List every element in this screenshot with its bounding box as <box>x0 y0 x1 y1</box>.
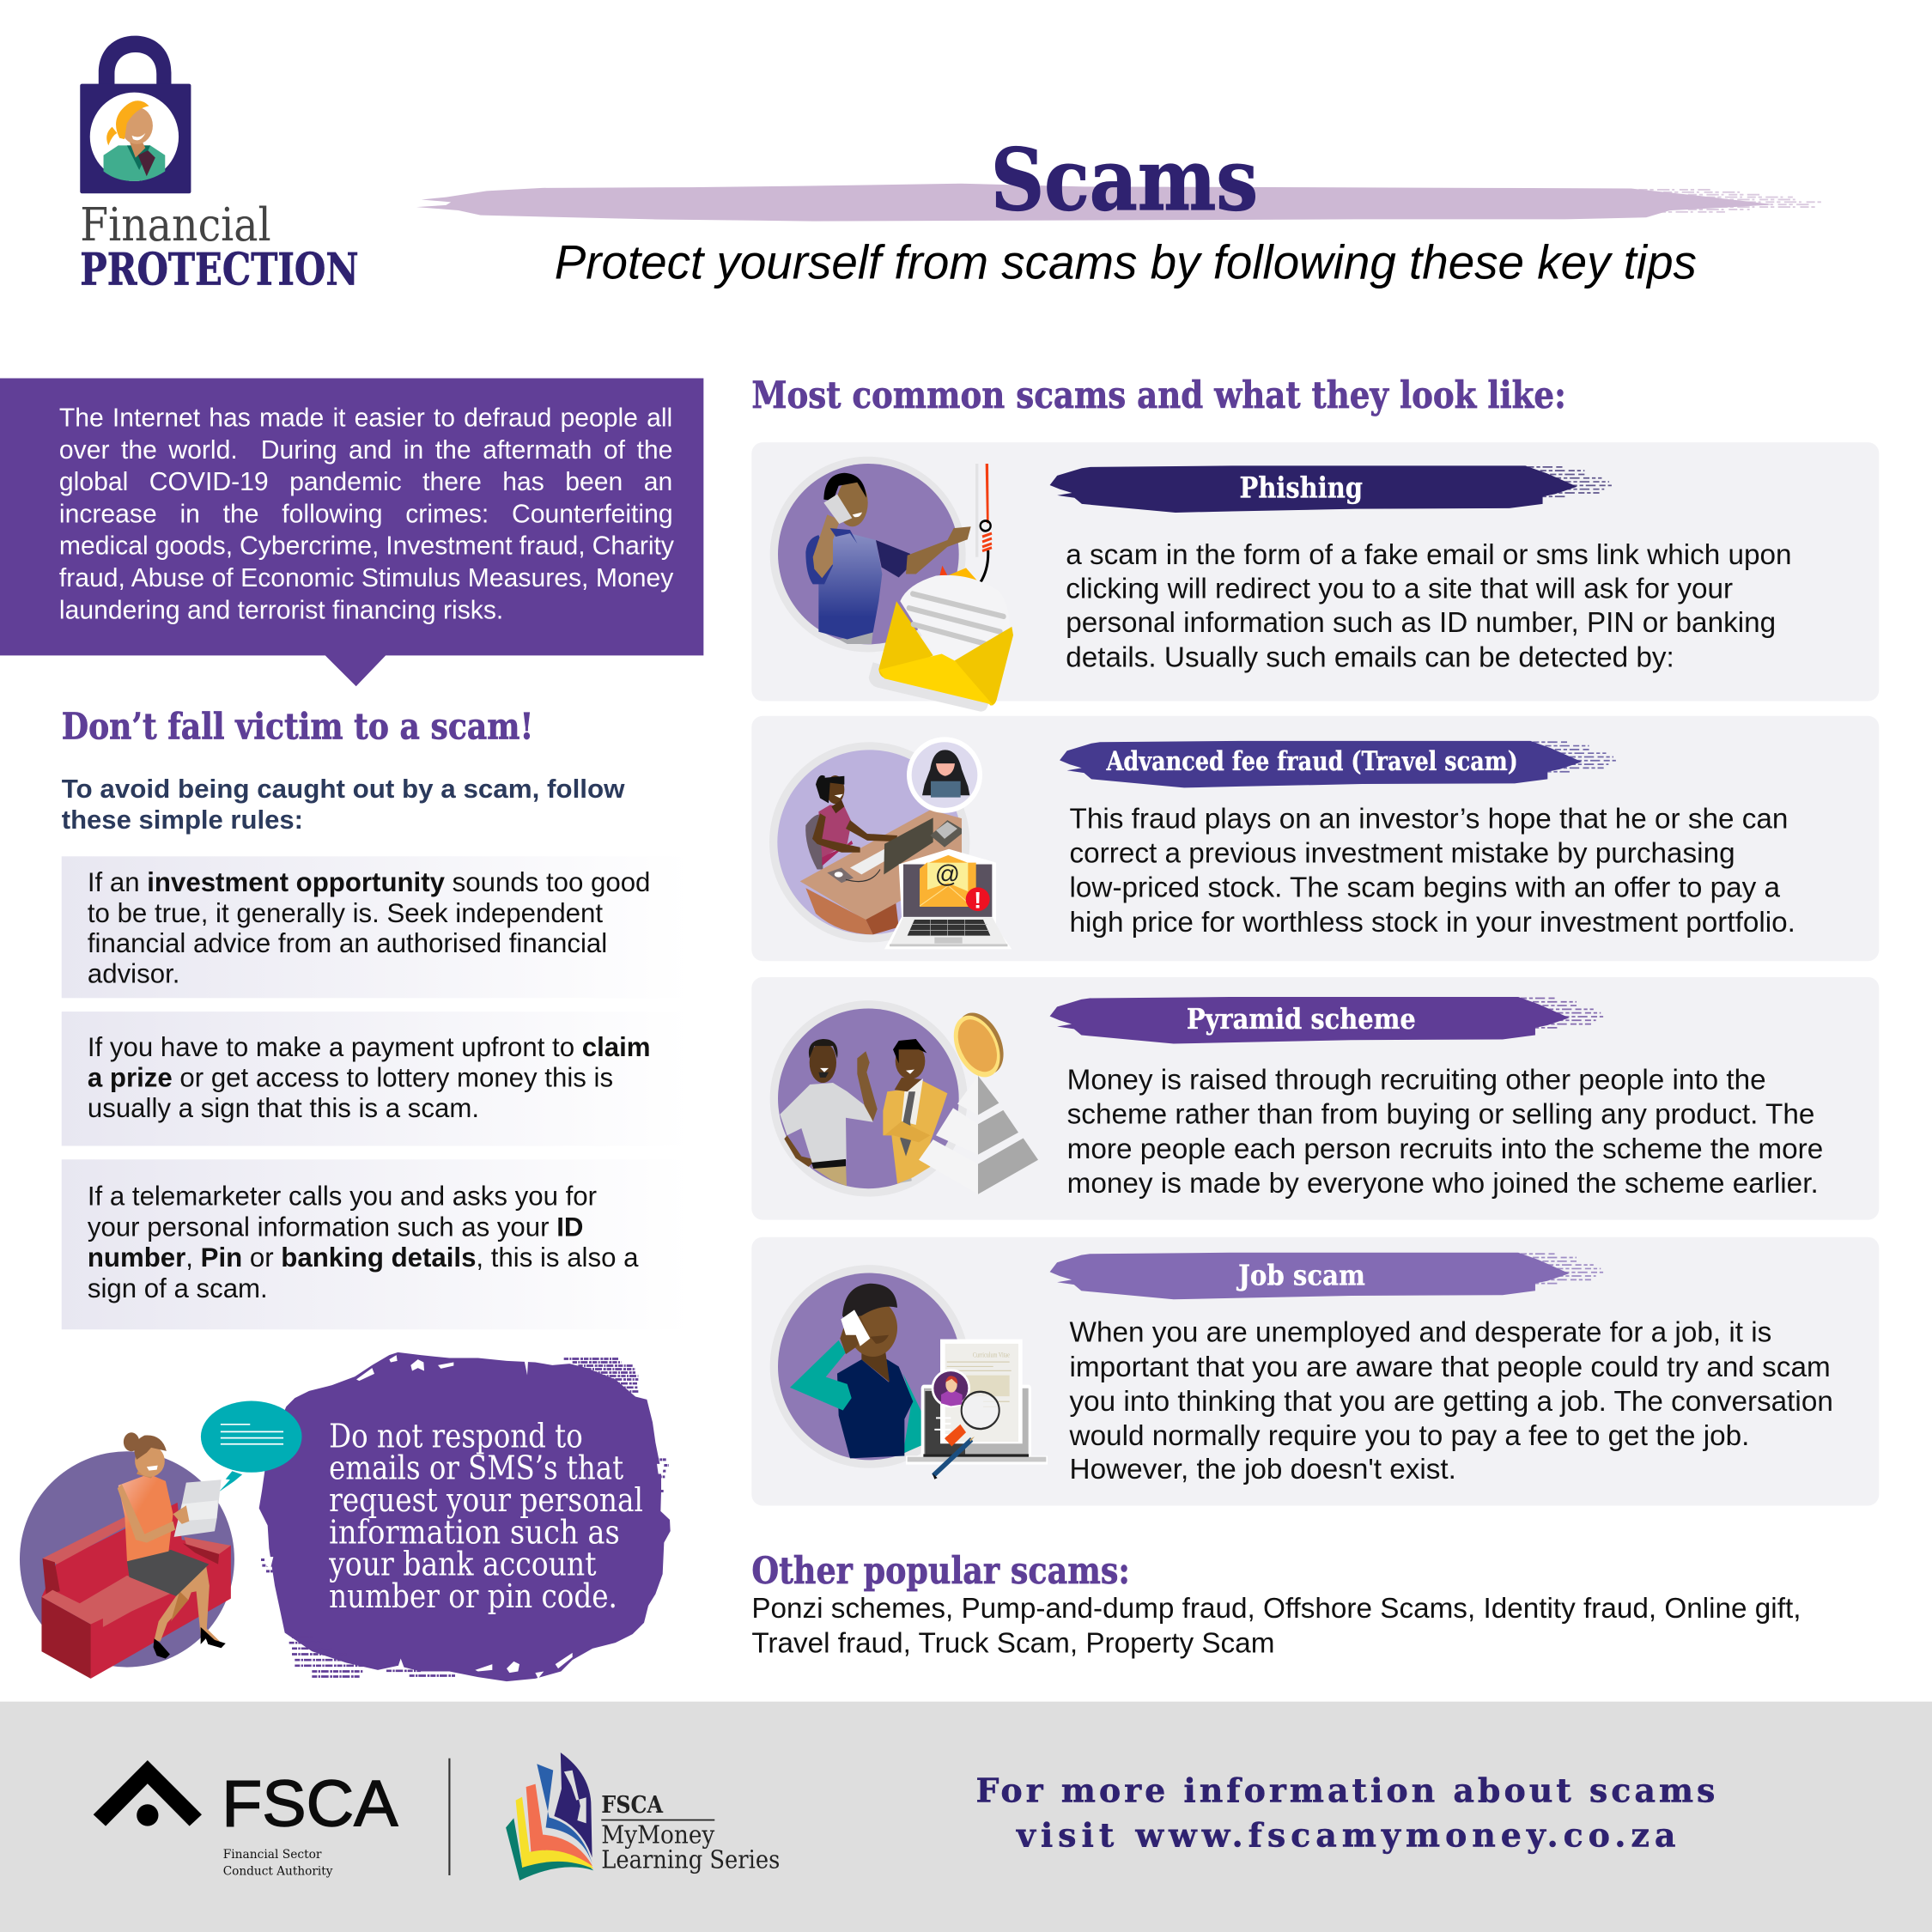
panel: pyramid scheme <box>751 977 1879 1220</box>
panel: advanced fee fraud <box>751 716 1879 961</box>
heading: don't fall victim: Don’t fall victim to a scam! <box>62 705 533 747</box>
text: pyramid scheme description: Money is raised through recruiting other people into the <box>1067 1064 1766 1096</box>
footer band <box>0 1702 1932 1932</box>
panel: introduction: global COVID-19 pandemic there has been an <box>59 468 672 496</box>
logo: FSCA <box>94 1760 398 1878</box>
icon: two men and coin on pyramid <box>770 1000 1038 1197</box>
illustration: worried woman on sofa with letter <box>20 1432 242 1679</box>
panel: introduction: laundering and terrorist financing risks. <box>59 596 503 624</box>
rule: investment opportunity: If an investment opportunity sounds too good <box>88 867 650 897</box>
rule: telemarketer <box>62 1159 690 1329</box>
callout text: number or pin code. <box>329 1577 617 1615</box>
callout text: information such as <box>329 1513 620 1551</box>
text: other popular scams list: Travel fraud, Truck Scam, Property Scam <box>751 1627 1274 1659</box>
logo: FSCA: Conduct Authority <box>223 1864 333 1878</box>
text: advanced fee fraud description: This fraud plays on an investor’s hope that he or she can <box>1070 803 1788 835</box>
text: advanced fee fraud description: low-priced stock. The scam begins with an offer to pay a <box>1070 872 1781 904</box>
heading: most common scams: Most common scams and what they look like: <box>751 374 1566 417</box>
icon: at sign and alert mark: ! <box>974 887 981 914</box>
panel: introduction: The Internet has made it easier to defraud people all <box>59 404 672 432</box>
title brush stroke <box>416 184 1821 222</box>
icon label: curriculum vitae: Curriculum Vitae <box>973 1352 1010 1359</box>
logo: FSCA: Financial Sector <box>223 1848 322 1862</box>
subheading: simple rules <box>62 774 626 835</box>
icon: at sign and alert mark <box>935 860 981 914</box>
rule: telemarketer: If a telemarketer calls you and asks you for <box>88 1181 597 1211</box>
panel: introduction: increase in the following crimes: Counterfeiting <box>59 500 673 528</box>
text: advanced fee fraud description <box>1070 803 1795 939</box>
subtitle: Protect yourself from scams by following these key tips <box>555 235 1697 289</box>
rule: telemarketer: sign of a scam. <box>88 1273 268 1303</box>
text: phishing description: a scam in the form of a fake email or sms link which upon <box>1066 539 1792 571</box>
callout: purple brush blob <box>259 1352 671 1681</box>
badge: job scam <box>1050 1253 1603 1299</box>
rule: investment opportunity <box>62 856 690 998</box>
panel: job scam <box>751 1237 1879 1506</box>
subheading: simple rules: these simple rules: <box>62 805 303 835</box>
text: job scam description: However, the job doesn't exist. <box>1070 1454 1456 1485</box>
logo: MyMoney Learning Series book <box>506 1753 780 1880</box>
text: phishing description: details. Usually such emails can be detected by: <box>1066 641 1674 673</box>
footer call to action <box>975 1771 1715 1854</box>
logo wordmark: Financial <box>80 198 271 252</box>
panel: introduction <box>0 379 703 686</box>
badge: Phishing <box>1050 465 1612 513</box>
text: phishing description <box>1066 539 1792 673</box>
rule: claim a prize: If you have to make a payment upfront to claim <box>88 1032 651 1062</box>
text: other popular scams list: Ponzi schemes, Pump-and-dump fraud, Offshore Scams, Identity fraud, Online gift, <box>751 1593 1801 1625</box>
callout text: emails or SMS’s that <box>329 1449 623 1487</box>
text: job scam description <box>1069 1317 1833 1485</box>
text: pyramid scheme description: more people each person recruits into the scheme the more <box>1067 1133 1823 1165</box>
text: pyramid scheme description: scheme rather than from buying or selling any product. The <box>1067 1099 1814 1131</box>
badge: advanced fee fraud <box>1060 741 1616 787</box>
badge: pyramid scheme: Pyramid scheme <box>1187 1002 1416 1036</box>
icon: man on phone with hooked email <box>770 457 1013 712</box>
text: job scam description: important that you are aware that people could try and scam <box>1070 1352 1831 1383</box>
badge: pyramid scheme <box>1050 997 1603 1044</box>
panel: introduction: medical goods, Cybercrime, Investment fraud, Charity <box>59 532 674 561</box>
badge: Phishing: Phishing <box>1240 471 1363 505</box>
rule: investment opportunity: to be true, it generally is. Seek independent <box>88 898 603 928</box>
rule: telemarketer: your personal information such as your ID <box>88 1212 583 1242</box>
logo: Financial Protection padlock <box>80 36 191 193</box>
callout text <box>328 1417 643 1615</box>
logo: FSCA: FSCA <box>222 1768 398 1841</box>
panel: phishing <box>751 442 1879 712</box>
subheading: simple rules: To avoid being caught out by a scam, follow <box>62 774 626 804</box>
text: job scam description: would normally require you to pay a fee to get the job. <box>1069 1420 1749 1452</box>
panel: introduction: fraud, Abuse of Economic Stimulus Measures, Money <box>59 564 673 592</box>
panel: introduction: over the world. During and in the aftermath of the <box>59 436 672 465</box>
text: phishing description: clicking will redirect you to a site that will ask for your <box>1066 574 1733 605</box>
logo wordmark: PROTECTION <box>80 244 359 295</box>
text: job scam description: When you are unemployed and desperate for a job, it is <box>1070 1317 1771 1349</box>
rule: telemarketer: number, Pin or banking details, this is also a <box>88 1242 639 1273</box>
heading: other popular scams: Other popular scams: <box>751 1550 1130 1593</box>
logo: MyMoney Learning Series book: FSCA <box>601 1791 664 1819</box>
icon: at sign and alert mark: @ <box>935 860 960 888</box>
icon: woman at desk, hacker and laptop with email alert <box>769 737 1012 949</box>
callout text: request your personal <box>329 1481 643 1519</box>
title: Scams <box>991 131 1258 230</box>
text: pyramid scheme description: money is made by everyone who joined the scheme earlier. <box>1067 1168 1819 1200</box>
rule: claim a prize: a prize or get access to lottery money this is <box>88 1063 613 1093</box>
rule: investment opportunity: financial advice from an authorised financial <box>88 928 607 958</box>
speech bubble <box>201 1401 302 1473</box>
callout text: Do not respond to <box>329 1417 583 1455</box>
footer call to action: visit www.fscamymoney.co.za <box>1016 1815 1676 1854</box>
text: job scam description: you into thinking that you are getting a job. The conversation <box>1070 1386 1833 1418</box>
logo wordmark <box>80 198 359 295</box>
logo: MyMoney Learning Series book: Learning Series <box>601 1844 780 1874</box>
icon: woman on phone with CV and laptop <box>770 1265 1048 1479</box>
badge: job scam: Job scam <box>1236 1259 1365 1292</box>
badge: advanced fee fraud: Advanced fee fraud (Travel scam) <box>1106 746 1518 777</box>
callout text: your bank account <box>328 1546 597 1583</box>
logo: MyMoney Learning Series book: MyMoney <box>601 1820 715 1850</box>
text: advanced fee fraud description: high price for worthless stock in your investment portfolio. <box>1070 907 1795 939</box>
text: other popular scams list <box>751 1593 1801 1659</box>
footer call to action: For more information about scams <box>975 1771 1715 1810</box>
text: phishing description: personal information such as ID number, PIN or banking <box>1066 607 1776 639</box>
rule: investment opportunity: advisor. <box>88 958 179 988</box>
text: pyramid scheme description <box>1067 1064 1823 1200</box>
rule: claim a prize: usually a sign that this is a scam. <box>88 1093 479 1123</box>
rule: claim a prize <box>62 1012 690 1146</box>
text: advanced fee fraud description: correct a previous investment mistake by purchasing <box>1070 837 1735 869</box>
